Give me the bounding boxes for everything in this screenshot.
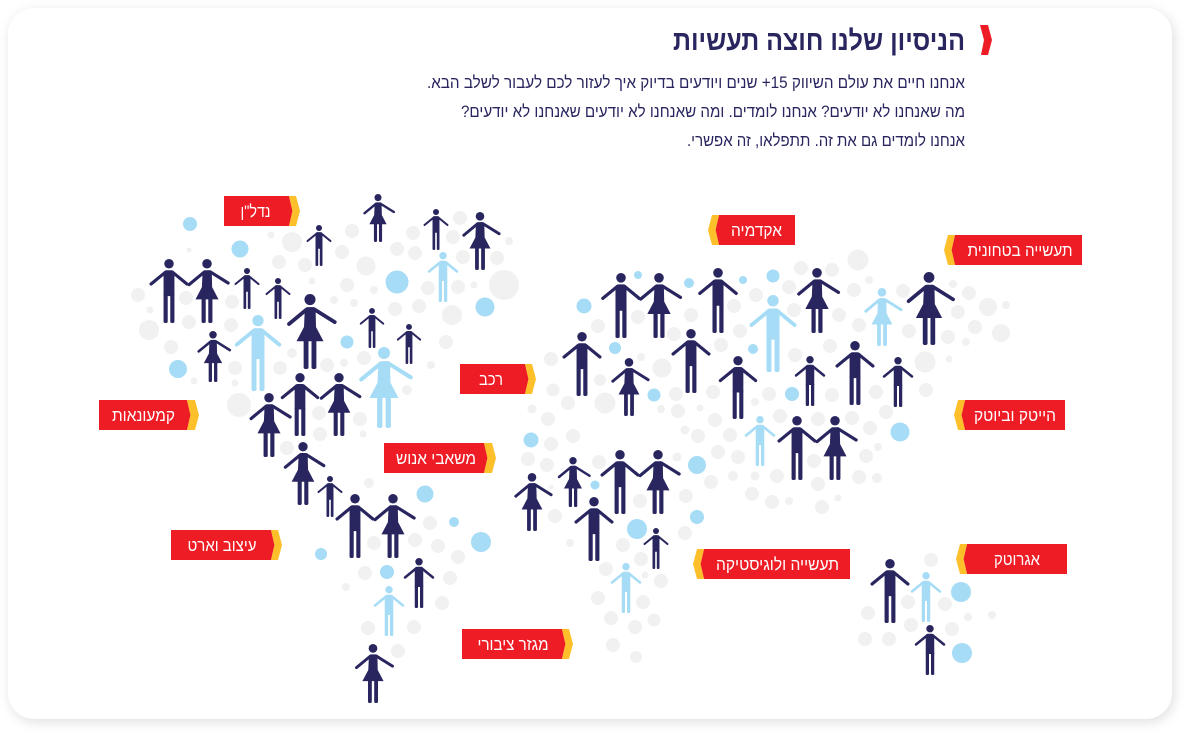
label: academia (708, 215, 795, 245)
figures: east cluster (516, 268, 953, 613)
man (837, 341, 873, 405)
woman (365, 194, 394, 242)
label: automotive: רכב (479, 370, 503, 389)
label: design and art: עיצוב וארט (188, 536, 257, 555)
woman (641, 273, 680, 338)
man (645, 528, 667, 569)
label: defense industry: תעשייה בטחונית (968, 241, 1072, 260)
man (602, 450, 638, 514)
woman (866, 288, 901, 346)
label: industry and logistics: תעשייה ולוגיסטיקה (716, 555, 839, 574)
man (429, 252, 457, 302)
label: design and art (171, 530, 282, 560)
label: hi-tech and biotech: הייטק וביוטק (974, 406, 1056, 425)
woman (321, 373, 360, 436)
man (308, 225, 330, 266)
man (916, 625, 944, 675)
label: retail (99, 400, 199, 430)
man (700, 268, 736, 333)
man (796, 356, 824, 406)
label: automotive (460, 364, 536, 394)
label: real estate: נדל"ן (240, 202, 270, 221)
label: defense industry (944, 235, 1082, 265)
label: agrotech: אגרוטק (994, 550, 1040, 569)
label: industry and logistics (693, 549, 850, 579)
label: public sector: מגזר ציבורי (478, 635, 548, 654)
woman (559, 457, 590, 507)
man (576, 497, 612, 561)
man (720, 356, 756, 419)
intro text: מה שאנחנו לא יודעים? אנחנו לומדים. ומה שאנחנו לא יודעים שאנחנו לא יודעים? (461, 103, 965, 121)
woman (289, 294, 335, 369)
figures: west cluster (151, 194, 499, 703)
label: retail: קמעונאות (112, 406, 175, 425)
title: הניסיון שלנו חוצה תעשיות (673, 25, 965, 56)
man (319, 476, 341, 517)
woman (251, 393, 290, 457)
woman (199, 331, 230, 382)
heading chevron (980, 25, 992, 55)
woman (909, 272, 953, 345)
man (151, 259, 187, 323)
man (779, 416, 815, 480)
man (425, 209, 447, 250)
man (337, 494, 373, 558)
woman (516, 473, 551, 531)
woman (613, 358, 648, 416)
man (405, 558, 433, 608)
man (564, 332, 600, 396)
background dots: grey (131, 211, 1010, 663)
man (361, 308, 383, 348)
man (267, 278, 289, 319)
man (884, 357, 912, 407)
intro text: אנחנו חיים את עולם השיווק 15+ שנים ויודעים בדיוק איך לעזור לכם לעבור לשלב הבא. (427, 74, 966, 92)
figures: southeast cluster (872, 559, 944, 675)
man (746, 416, 774, 466)
man (398, 324, 420, 364)
woman (817, 416, 856, 480)
label: real estate (224, 196, 300, 226)
man (603, 273, 639, 338)
man (912, 572, 940, 622)
man (751, 295, 795, 372)
man (237, 315, 279, 391)
woman (375, 494, 414, 558)
label: agrotech (956, 544, 1067, 574)
man (872, 559, 908, 623)
label: hi-tech and biotech (954, 400, 1065, 430)
woman (640, 450, 679, 514)
man (612, 563, 640, 613)
label: academia: אקדמיה (731, 221, 782, 240)
man (282, 373, 318, 436)
label: public sector (462, 629, 573, 659)
woman (356, 644, 392, 703)
intro text (427, 74, 966, 150)
woman (464, 212, 499, 270)
man (375, 586, 403, 636)
label: human resources (384, 443, 496, 473)
woman (361, 347, 411, 428)
woman (189, 259, 228, 323)
label: human resources: משאבי אנוש (396, 449, 476, 468)
woman (799, 268, 838, 333)
woman (285, 442, 324, 505)
man (673, 329, 709, 393)
intro text: אנחנו לומדים גם את זה. תתפלאו, זה אפשרי. (687, 132, 966, 150)
man (236, 268, 258, 309)
background dots: blue (169, 217, 972, 663)
